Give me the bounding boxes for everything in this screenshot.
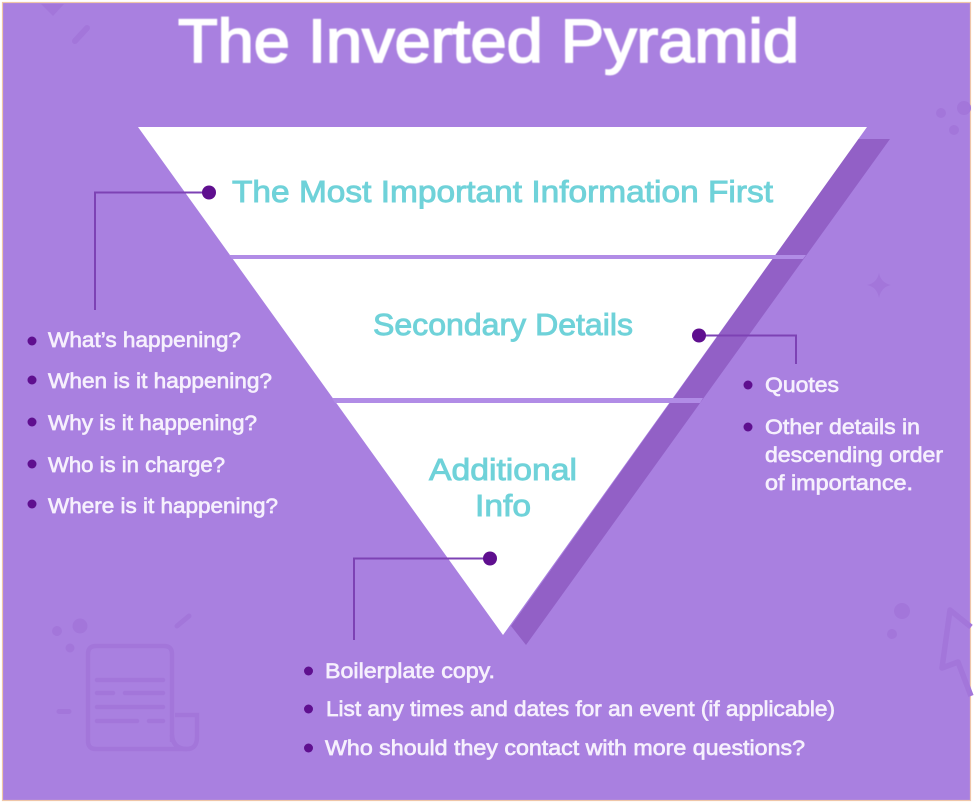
icon: corner dots [936, 101, 971, 135]
tier heading 3 [429, 452, 577, 523]
right list: descending order [765, 444, 943, 467]
right list: Other details in [765, 416, 920, 439]
tier divider 1 [229, 255, 806, 259]
tier divider 2 [332, 398, 703, 403]
tier heading 3: Additional [429, 452, 577, 487]
tier heading 1: The Most Important Information First [232, 174, 773, 209]
connector: top tier to left list [95, 186, 216, 310]
title: The Inverted Pyramid [178, 7, 799, 75]
right list: Quotes [765, 374, 839, 397]
icon: document [52, 616, 197, 749]
left list: Why is it happening? [48, 412, 257, 435]
left list: When is it happening? [48, 370, 272, 393]
left list [28, 329, 278, 518]
icon: sparkle [867, 273, 891, 298]
pyramid body [138, 127, 867, 635]
tier heading 3: Info [475, 488, 531, 523]
tier heading 2: Secondary Details [373, 307, 633, 342]
bottom list [304, 660, 835, 760]
left list: Where is it happening? [48, 495, 278, 518]
icon: cursor arrow [887, 603, 971, 696]
right list: of importance. [765, 472, 913, 495]
pyramid shadow [511, 139, 890, 645]
left list: What’s happening? [48, 329, 241, 352]
connector: bottom tier to bottom list [354, 552, 497, 640]
bottom list: List any times and dates for an event (if applicable) [326, 698, 835, 721]
right list [744, 374, 943, 495]
bottom list: Who should they contact with more questions? [325, 737, 805, 760]
bottom list: Boilerplate copy. [325, 660, 495, 683]
icon: top-left marks [41, 4, 87, 41]
left list: Who is in charge? [48, 454, 225, 477]
connector: middle tier to right list [692, 328, 796, 364]
pyramid [138, 127, 890, 645]
